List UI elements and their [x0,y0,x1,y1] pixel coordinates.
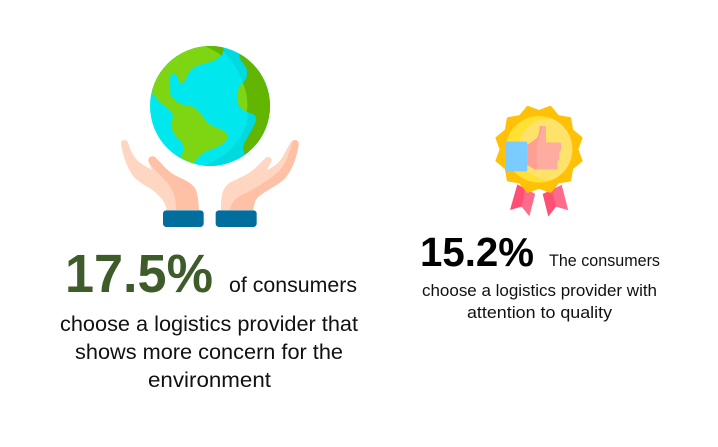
icon: thumbs-up medal [497,107,581,217]
right ribbon [543,185,568,217]
icon: globe held by hands [121,40,299,227]
description: choose a logistics provider that [60,313,358,336]
stat: 15.2% quality [420,229,660,322]
globe [150,46,270,166]
right hand [221,140,299,210]
description [422,281,657,322]
right cuff [216,210,257,227]
description [60,313,358,392]
blue cuff [506,142,527,171]
lead text: of consumers [229,274,357,297]
thumb hand [527,126,561,169]
left ribbon [510,184,535,216]
description: environment [148,369,271,392]
medal badge [497,107,581,191]
description: attention to quality [467,303,613,322]
big number: 15.2% [420,229,534,275]
description: shows more concern for the [75,341,343,364]
big number: 17.5% [65,244,213,304]
stat: 17.5% environment [60,244,358,392]
left cuff [163,210,204,227]
left hand [121,140,199,210]
infographic canvas [60,46,660,387]
lead text: The consumers [549,251,660,270]
description: choose a logistics provider with [422,281,657,300]
